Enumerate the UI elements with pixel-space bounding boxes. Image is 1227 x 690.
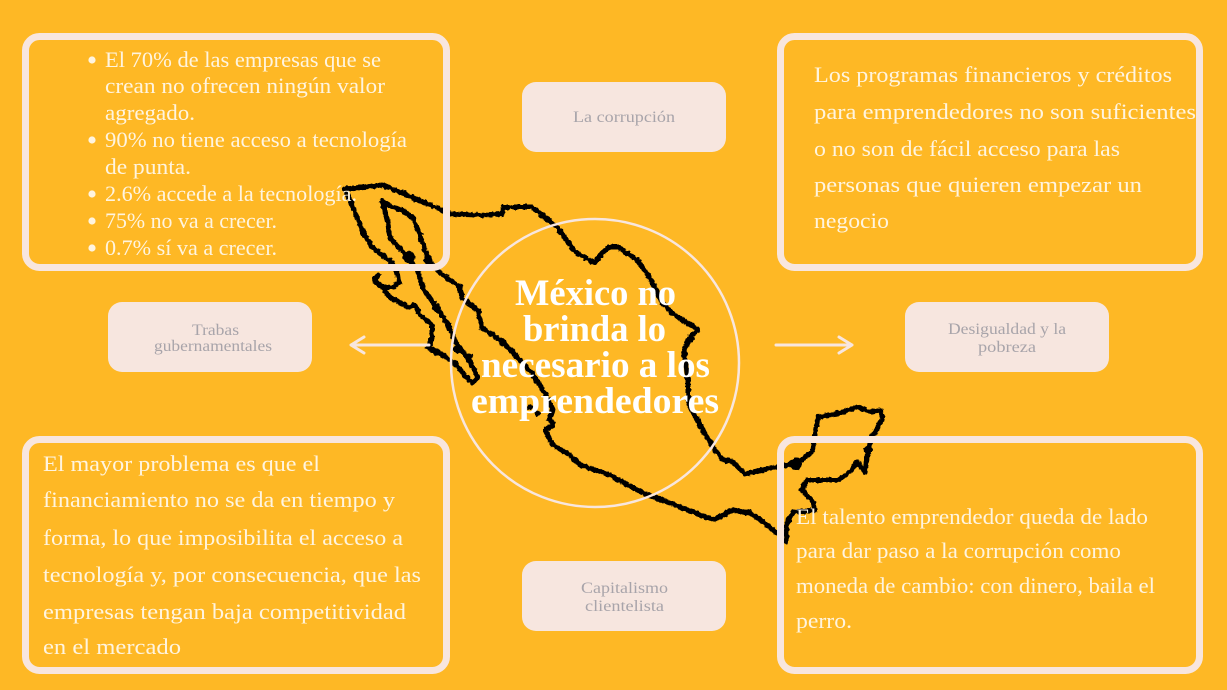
panel: top left statistics	[26, 36, 446, 268]
bullet list of statistics: El 70% de las empresas que se	[105, 47, 381, 72]
panel: top right financing programs	[780, 36, 1200, 268]
text: talent and corruption	[796, 504, 1155, 633]
bullet list of statistics: agregado.	[105, 100, 195, 125]
text: financing timing: financiamiento no se da en tiempo y	[43, 487, 395, 512]
pill: Desigualdad y la pobreza: Desigualdad y la	[948, 321, 1066, 338]
panel: bottom left financing timing	[26, 440, 446, 670]
pill: Capitalismo clientelista	[522, 561, 726, 631]
pill: Desigualdad y la pobreza: pobreza	[978, 339, 1036, 356]
text: financing programs: para emprendedores no son suficientes	[814, 99, 1196, 124]
title: brinda lo	[523, 309, 666, 350]
pill: Trabas gubernamentales: Trabas	[192, 322, 239, 339]
title: México no	[515, 273, 676, 314]
central circle	[451, 219, 739, 507]
text: financing programs: personas que quieren empezar un	[814, 172, 1142, 197]
bullet list of statistics: de punta.	[105, 154, 191, 179]
pill: Desigualdad y la pobreza	[905, 302, 1109, 372]
text: financing timing: en el mercado	[43, 634, 181, 659]
pill: Capitalismo clientelista: Capitalismo	[581, 580, 668, 597]
text: talent and corruption: para dar paso a la corrupción como	[796, 538, 1121, 563]
panel: bottom right talent	[780, 440, 1200, 670]
bullet list of statistics: crean no ofrecen ningún valor	[105, 73, 386, 98]
bullet list of statistics: 90% no tiene acceso a tecnología	[105, 127, 407, 152]
text: financing timing: forma, lo que imposibilita el acceso a	[43, 525, 403, 550]
text: financing programs	[814, 62, 1196, 233]
text: talent and corruption: moneda de cambio: con dinero, baila el	[796, 573, 1155, 598]
pill: La corrupción	[522, 82, 726, 152]
title: emprendedores	[471, 381, 719, 422]
title	[471, 273, 719, 422]
map of Mexico outline	[345, 185, 883, 542]
pill: Trabas gubernamentales: gubernamentales	[154, 338, 272, 355]
pill: Capitalismo clientelista: clientelista	[585, 598, 664, 615]
bullet list of statistics: 0.7% sí va a crecer.	[105, 235, 277, 260]
title: necesario a los	[481, 345, 710, 386]
text: talent and corruption: perro.	[796, 608, 852, 633]
bullet list of statistics: 2.6% accede a la tecnología.	[105, 181, 357, 206]
bullet list of statistics	[88, 47, 407, 260]
text: financing timing	[43, 451, 421, 659]
text: financing programs: o no son de fácil acceso para las	[814, 136, 1120, 161]
pill: Trabas gubernamentales	[108, 302, 312, 372]
text: financing timing: El mayor problema es que el	[43, 451, 320, 476]
text: talent and corruption: El talento emprendedor queda de lado	[796, 504, 1148, 529]
bullet list of statistics: 75% no va a crecer.	[105, 208, 277, 233]
text: financing timing: tecnología y, por consecuencia, que las	[43, 562, 421, 587]
arrow: left	[351, 337, 429, 353]
text: financing programs: negocio	[814, 208, 889, 233]
arrow: right	[776, 337, 852, 353]
text: financing programs: Los programas financieros y créditos	[814, 62, 1172, 87]
text: financing timing: empresas tengan baja competitividad	[43, 599, 406, 624]
pill: La corrupción: La corrupción	[573, 109, 675, 126]
